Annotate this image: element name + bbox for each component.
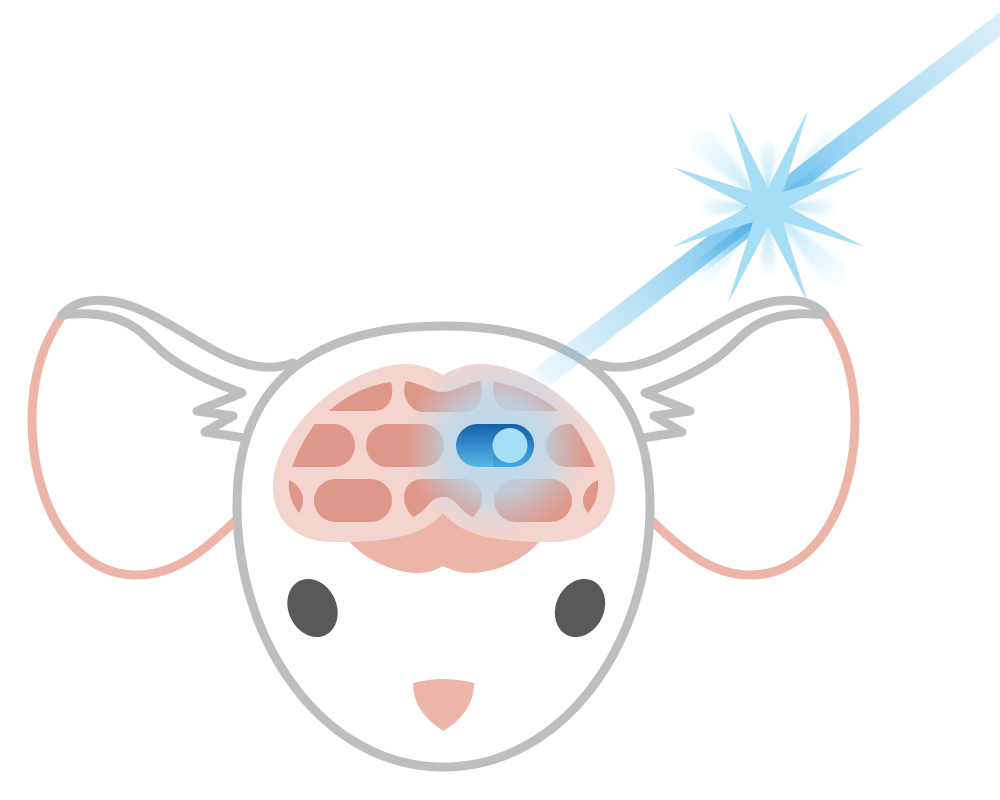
soft light rays — [687, 128, 849, 286]
optogenetic switch — [456, 424, 534, 467]
eye right — [546, 571, 614, 645]
laser beam — [520, 12, 1000, 398]
left ear — [32, 300, 293, 575]
head outline — [237, 326, 650, 767]
eye left — [278, 571, 347, 645]
brain — [273, 353, 615, 573]
lower brain lobes — [340, 500, 548, 573]
right ear — [594, 300, 855, 575]
brain cortex — [273, 364, 615, 542]
switch knob — [492, 428, 528, 463]
light glow — [410, 364, 584, 528]
star spikes — [672, 110, 865, 303]
brain cells — [289, 381, 598, 522]
nose — [413, 679, 474, 731]
